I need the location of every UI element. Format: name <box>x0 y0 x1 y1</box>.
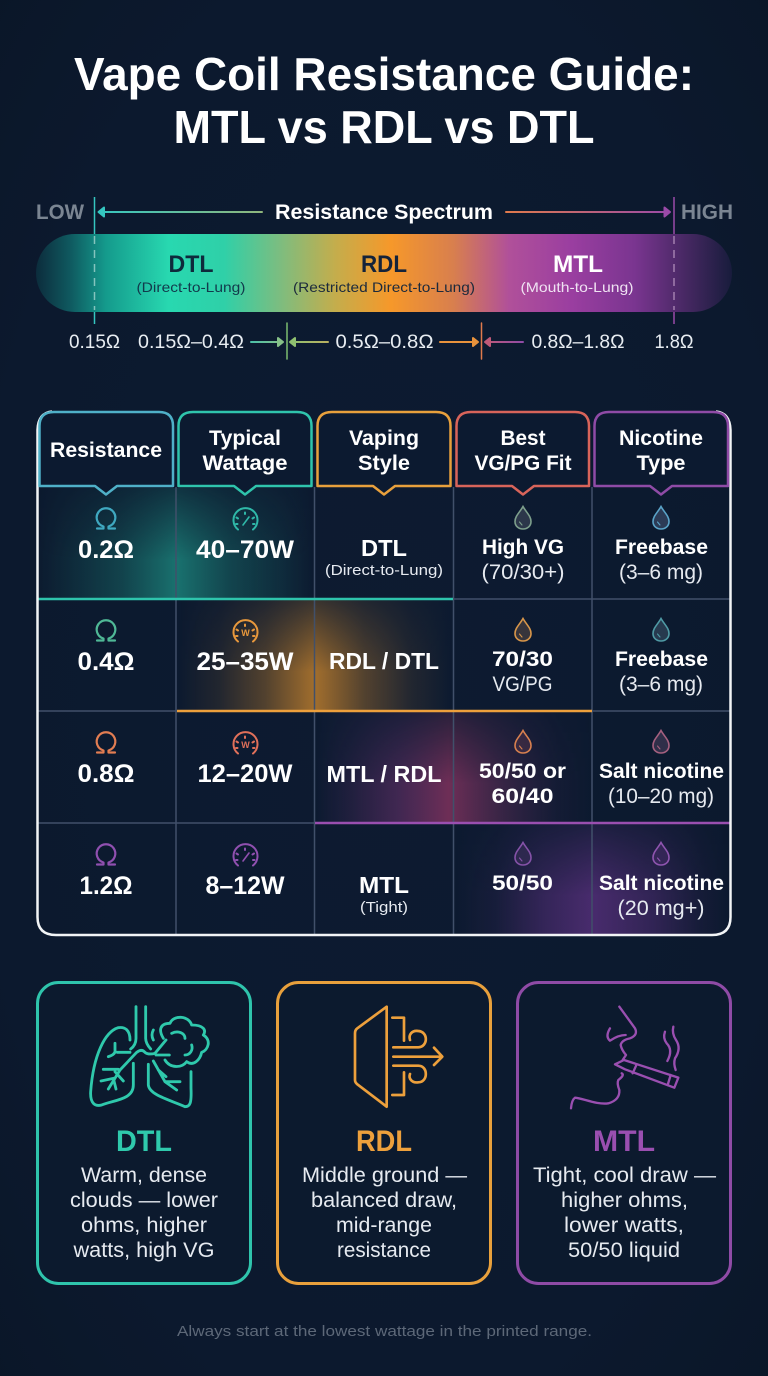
icon: drop <box>515 618 531 641</box>
range scale: 1.8Ω <box>654 332 694 353</box>
panel: DTL <box>38 982 250 1284</box>
icon: drop <box>653 730 669 753</box>
spectrum bar <box>36 234 732 312</box>
header: best vg/pg fit <box>456 412 589 494</box>
row: 0.8 ohm <box>78 730 724 808</box>
DTL description: Warm, dense <box>81 1163 207 1187</box>
DTL description <box>70 1163 218 1262</box>
RDL band label: (Restricted Direct-to-Lung) <box>293 279 475 295</box>
range scale <box>69 332 694 353</box>
DTL band label <box>136 251 246 295</box>
header: best vg/pg fit: VG/PG Fit <box>474 452 572 475</box>
icon: face with vape <box>571 1007 679 1108</box>
MTL description: higher ohms, <box>561 1188 688 1212</box>
header: vaping style: Style <box>358 452 410 475</box>
header: best vg/pg fit: Best <box>500 427 546 450</box>
header: nicotine type <box>594 412 728 494</box>
header: nicotine type: Nicotine <box>619 427 703 450</box>
nicotine value: (3–6 mg) <box>619 673 703 696</box>
nicotine value: (10–20 mg) <box>608 785 714 808</box>
header: nicotine type: Type <box>636 452 686 475</box>
nicotine value <box>615 648 708 696</box>
nicotine value: Salt nicotine <box>599 760 724 783</box>
icon: gauge <box>234 844 258 866</box>
style: RDL / DTL <box>329 648 439 674</box>
outer frame <box>38 412 730 935</box>
icon: drop <box>653 618 669 641</box>
icon: gauge with W: W <box>241 628 250 638</box>
value: 0.8Ω <box>78 760 134 788</box>
wattage: 25–35W <box>196 648 294 676</box>
DTL band label: DTL <box>168 251 214 278</box>
row: 0.4 ohm <box>78 618 708 696</box>
nicotine value: Freebase <box>615 536 708 559</box>
arrow: toward low <box>98 208 262 216</box>
header: typical wattage: Wattage <box>202 452 288 475</box>
high label: HIGH <box>681 201 733 224</box>
range scale: 0.15Ω–0.4Ω <box>138 332 244 353</box>
title: MTL vs RDL vs DTL <box>174 101 594 153</box>
icon: restricted airflow <box>355 1007 442 1107</box>
panel: MTL <box>518 982 730 1284</box>
icon: drop <box>515 506 531 529</box>
row: 0.2 ohm <box>78 506 708 584</box>
DTL description: watts, high VG <box>72 1238 214 1262</box>
style: MTL <box>359 872 409 898</box>
DTL title: DTL <box>116 1125 172 1158</box>
vg/pg value: 50/50 or <box>479 760 566 783</box>
value: 1.2Ω <box>80 872 132 900</box>
header: resistance <box>40 412 173 494</box>
DTL band label: (Direct-to-Lung) <box>136 279 246 295</box>
nicotine value: Salt nicotine <box>599 872 724 895</box>
footer note: Always start at the lowest wattage in the printed range. <box>177 1323 592 1340</box>
MTL description: lower watts, <box>564 1213 684 1237</box>
range scale: 0.8Ω–1.8Ω <box>532 332 624 353</box>
arrow: toward high <box>506 208 670 216</box>
high boundary marker <box>673 197 675 324</box>
header: resistance: Resistance <box>50 439 162 462</box>
title <box>74 48 694 153</box>
RDL band label <box>293 251 475 295</box>
RDL description: balanced draw, <box>311 1188 457 1212</box>
RDL band label: RDL <box>361 251 407 278</box>
header: typical wattage: Typical <box>209 427 281 450</box>
RDL title: RDL <box>356 1125 412 1158</box>
icon: drop <box>653 842 669 865</box>
style: DTL <box>361 535 407 561</box>
vg/pg value <box>479 760 566 808</box>
range arrows and dividers <box>251 323 523 359</box>
icon: lungs with cloud <box>91 1007 208 1107</box>
accent row lines <box>38 599 730 823</box>
nicotine value <box>599 760 724 808</box>
range scale: 0.5Ω–0.8Ω <box>336 332 434 353</box>
icon: gauge <box>234 508 258 530</box>
wattage: 12–20W <box>198 760 293 788</box>
nicotine value <box>599 872 724 920</box>
header: vaping style <box>318 412 450 494</box>
icon: drop <box>515 842 531 865</box>
vg/pg value: (70/30+) <box>482 561 564 584</box>
icon: ohm <box>97 844 115 864</box>
style note: (Tight) <box>360 900 408 916</box>
style note: (Direct-to-Lung) <box>325 563 443 579</box>
icon: gauge with W <box>234 732 258 754</box>
header: typical wattage <box>178 412 312 494</box>
value: 0.2Ω <box>78 536 134 564</box>
nicotine value <box>615 536 708 584</box>
icon: ohm <box>97 732 115 752</box>
vg/pg value: VG/PG <box>492 673 552 696</box>
wattage: 8–12W <box>206 872 285 900</box>
MTL band label: (Mouth-to-Lung) <box>520 279 634 295</box>
vg/pg value <box>492 648 553 696</box>
nicotine value: (3–6 mg) <box>619 561 703 584</box>
MTL band label <box>520 251 634 295</box>
icon: ohm <box>97 620 115 640</box>
icon: gauge with W: W <box>241 740 250 750</box>
range scale: 0.15Ω <box>69 332 120 353</box>
grid lines <box>38 487 730 935</box>
value: 0.4Ω <box>78 648 134 676</box>
RDL description: Middle ground — <box>302 1163 467 1187</box>
wattage: 40–70W <box>196 536 294 564</box>
vg/pg value <box>482 536 564 584</box>
style: MTL / RDL <box>326 761 442 787</box>
DTL description: clouds — lower <box>70 1188 218 1212</box>
vg/pg value: 50/50 <box>492 872 553 895</box>
nicotine value: (20 mg+) <box>618 897 704 920</box>
icon: drop <box>653 506 669 529</box>
vg/pg value: 60/40 <box>492 785 554 808</box>
low label: LOW <box>36 201 84 224</box>
DTL description: ohms, higher <box>81 1213 207 1237</box>
icon: gauge with W <box>234 620 258 642</box>
nicotine value: Freebase <box>615 648 708 671</box>
vg/pg value: High VG <box>482 536 564 559</box>
MTL description <box>533 1163 717 1262</box>
comparison table <box>38 412 730 935</box>
RDL description: resistance <box>337 1238 431 1262</box>
row glows <box>40 488 730 934</box>
icon: ohm <box>97 508 115 528</box>
row: 1.2 ohm <box>80 842 724 920</box>
RDL description: mid-range <box>336 1213 432 1237</box>
spectrum heading: Resistance Spectrum <box>275 201 493 224</box>
panel: RDL <box>278 982 490 1284</box>
icon: drop <box>515 730 531 753</box>
RDL description <box>302 1163 467 1262</box>
low boundary marker <box>94 197 96 324</box>
header: vaping style: Vaping <box>349 427 419 450</box>
MTL description: Tight, cool draw — <box>533 1163 717 1187</box>
MTL title: MTL <box>593 1125 655 1158</box>
title: Vape Coil Resistance Guide: <box>74 48 694 100</box>
MTL band label: MTL <box>553 251 603 278</box>
MTL description: 50/50 liquid <box>568 1238 680 1262</box>
vg/pg value: 70/30 <box>492 648 553 671</box>
resistance spectrum <box>36 197 733 359</box>
